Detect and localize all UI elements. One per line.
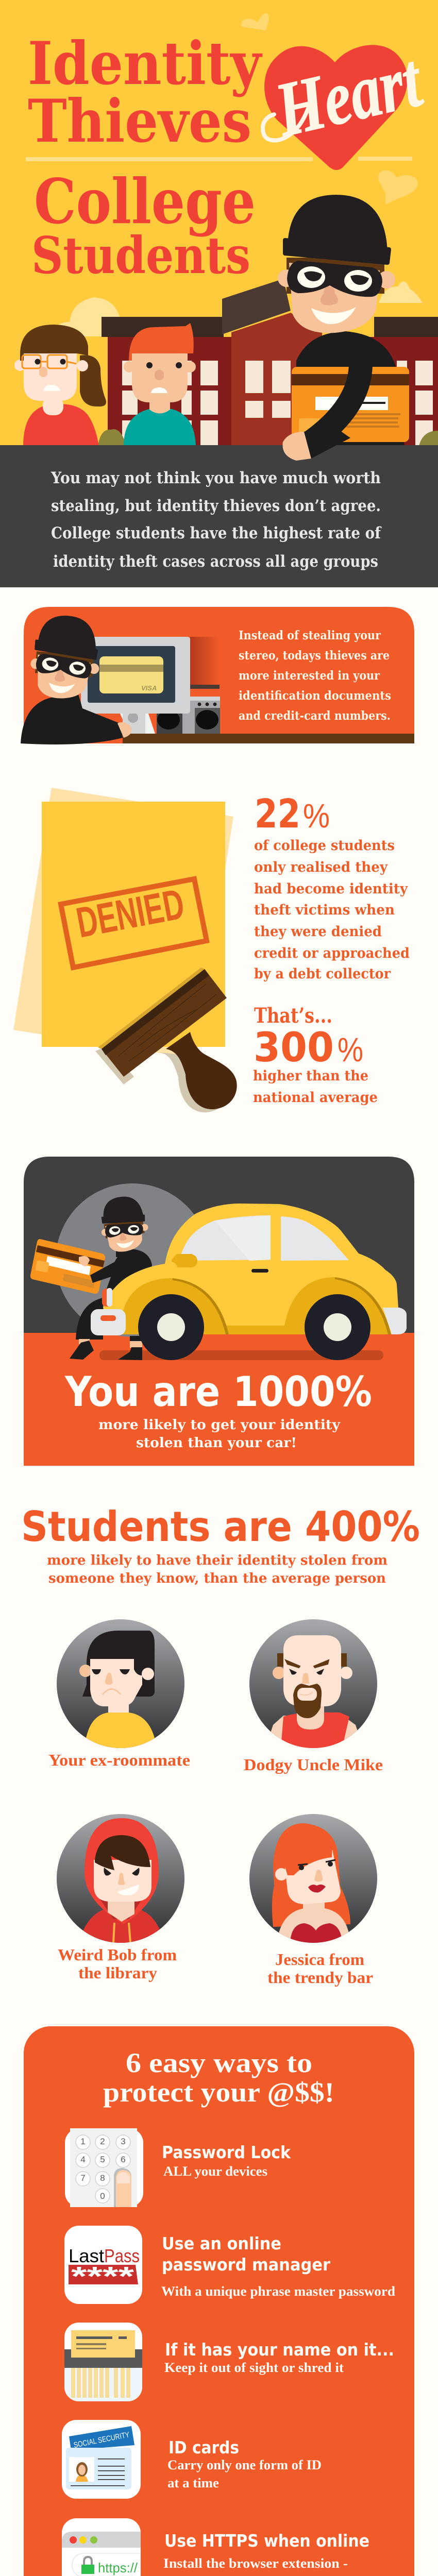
portrait: weird bob	[57, 1814, 184, 1943]
cloud left	[52, 297, 120, 336]
car	[91, 1204, 407, 1360]
subheading: someone they know: someone they know, than the average person	[48, 1571, 386, 1586]
stat description: by a debt collector	[254, 966, 391, 982]
icon: small heart top	[241, 13, 269, 30]
tip: use https: Install the browser extension -	[163, 2556, 348, 2571]
intro text: College students have the highest rate of	[51, 524, 381, 543]
stat description: theft victims when	[254, 902, 395, 918]
stat: 300 percent: %	[338, 1030, 363, 1069]
credit card	[292, 367, 409, 442]
label: weird bob: the library	[78, 1963, 157, 1982]
icon: keypad: 4	[80, 2155, 86, 2164]
wooden stamp	[95, 968, 237, 1112]
boombox	[157, 685, 220, 734]
stat: 300 percent: higher than the	[253, 1068, 368, 1084]
car panel subtext	[98, 1417, 341, 1451]
icon: lastpass: Pass	[104, 2245, 140, 2266]
title: College Students: College	[34, 165, 256, 238]
character: thief at computer	[21, 614, 131, 744]
title rule	[26, 157, 313, 161]
icon: keypad: 8	[100, 2173, 105, 2183]
tip: use https: Use HTTPS when online	[164, 2531, 369, 2551]
stat: 22 percent: 22	[255, 791, 300, 837]
label: ex-roommate: Your ex-roommate	[48, 1751, 190, 1769]
subheading: someone they know	[47, 1553, 388, 1586]
car panel subtext: more likely to get your identity	[98, 1417, 341, 1433]
icon: small heart right	[378, 171, 418, 205]
panel text	[239, 629, 391, 723]
tip: shred it: If it has your name on it...	[165, 2340, 394, 2360]
stat: 300 percent	[253, 1004, 378, 1106]
portrait: ex-roommate	[57, 1619, 184, 1748]
title: College Students: Students	[31, 226, 250, 285]
tip: password lock: Password Lock	[162, 2142, 291, 2162]
icon: keypad: 1	[80, 2137, 86, 2146]
credit card	[30, 1239, 105, 1294]
computer monitor with card: VISA	[141, 684, 157, 692]
icon: keypad: 2	[100, 2137, 105, 2146]
panel: stereo vs documents	[21, 607, 414, 744]
stat: 300 percent: That’s...	[254, 1004, 332, 1028]
icon: lastpass: Last	[69, 2245, 104, 2266]
tip: password manager: password manager	[162, 2255, 331, 2275]
panel: car comparison	[24, 1157, 414, 1466]
title: Identity Thieves: Thieves	[28, 87, 251, 156]
portrait: uncle mike	[249, 1619, 377, 1748]
icon: keypad: 5	[100, 2155, 105, 2164]
tip: password lock	[162, 2142, 291, 2179]
heading: 6 easy ways: protect your @$$!	[103, 2077, 334, 2108]
character: thief holding credit card	[278, 195, 409, 461]
character: girl with glasses	[14, 325, 106, 446]
icon: https browser: https://	[98, 2560, 138, 2575]
panel text: and credit-card numbers.	[239, 709, 391, 723]
tip: password manager: Use an online	[162, 2233, 281, 2253]
tip: password lock: ALL your devices	[163, 2164, 267, 2179]
icon: large heart	[264, 45, 408, 170]
tip: password manager	[161, 2233, 396, 2299]
title: Identity Thieves	[28, 29, 262, 156]
intro text: You may not think you have much worth	[50, 469, 381, 487]
icon: lastpass: ****	[71, 2262, 134, 2292]
label: jessica	[267, 1950, 373, 1987]
icon: keypad: 0	[100, 2191, 105, 2201]
denied stamp mark	[61, 879, 207, 968]
stat: 300 percent: 300	[254, 1025, 334, 1071]
stat description: of college students	[254, 838, 395, 854]
label: weird bob: Weird Bob from	[58, 1945, 177, 1964]
panel: intro statement	[0, 423, 438, 587]
icon: https browser	[62, 2518, 149, 2576]
character: thief with card	[30, 1194, 152, 1360]
tip: id cards: Carry only one form of ID	[167, 2458, 322, 2472]
tip: password manager: With a unique phrase master password	[161, 2284, 396, 2299]
portrait: jessica	[249, 1814, 377, 1943]
panel text: identification documents	[239, 689, 391, 703]
illustration: denied stamp	[13, 788, 237, 1112]
icon: keypad	[65, 2128, 143, 2207]
subheading: someone they know: more likely to have their identity stolen from	[47, 1553, 388, 1568]
icon: keypad: 3	[121, 2137, 126, 2146]
tip: use https	[163, 2531, 369, 2576]
label: jessica: the trendy bar	[267, 1968, 373, 1987]
computer monitor with card	[81, 637, 190, 734]
intro text	[50, 469, 381, 571]
tip: id cards	[167, 2437, 322, 2490]
heading: 6 easy ways	[103, 2047, 334, 2108]
panel: six easy ways	[24, 2026, 414, 2576]
stat: 300 percent: national average	[253, 1090, 378, 1106]
intro text: identity theft cases across all age groups	[53, 552, 378, 571]
stat: 22 percent	[254, 791, 410, 982]
tip: id cards: ID cards	[169, 2437, 239, 2458]
stat: 22 percent: %	[303, 796, 330, 835]
label: weird bob	[58, 1945, 177, 1982]
car panel subtext: stolen than your car!	[136, 1435, 297, 1451]
panel text: Instead of stealing your	[239, 629, 381, 642]
tip: id cards: at a time	[167, 2476, 219, 2490]
label: uncle mike: Dodgy Uncle Mike	[244, 1755, 383, 1774]
panel: hero	[0, 0, 438, 461]
title: College Students	[31, 165, 256, 285]
tip: shred it: Keep it out of sight or shred it	[164, 2360, 344, 2375]
panel text: more interested in your	[239, 669, 380, 683]
stat description: only realised they	[254, 859, 388, 875]
icon: shredder	[64, 2323, 142, 2401]
intro text: stealing, but identity thieves don’t agree.	[51, 497, 381, 515]
tip: shred it	[164, 2340, 394, 2375]
icon: id cards	[62, 2420, 141, 2499]
stat description	[254, 838, 410, 982]
monitor shadow	[190, 637, 218, 686]
stat description: they were denied	[254, 924, 382, 940]
heading: 6 easy ways: 6 easy ways to	[126, 2047, 312, 2078]
icon: keypad: 7	[80, 2173, 86, 2183]
title: Identity Thieves: Identity	[28, 29, 262, 98]
denied stamp mark: DENIED	[73, 879, 188, 947]
stat description: credit or approached	[254, 945, 410, 961]
building	[98, 279, 438, 446]
icon: keypad: 6	[121, 2155, 126, 2164]
icon: lastpass	[64, 2226, 142, 2304]
icon: id cards: SOCIAL SECURITY	[73, 2430, 130, 2450]
label: jessica: Jessica from	[275, 1950, 364, 1969]
panel text: stereo, todays thieves are	[239, 649, 390, 663]
stat description: had become identity	[254, 881, 408, 897]
character: red-haired boy	[124, 323, 196, 446]
cloud right	[379, 281, 423, 303]
headline: 1000 percent: You are 1000%	[64, 1368, 372, 1416]
